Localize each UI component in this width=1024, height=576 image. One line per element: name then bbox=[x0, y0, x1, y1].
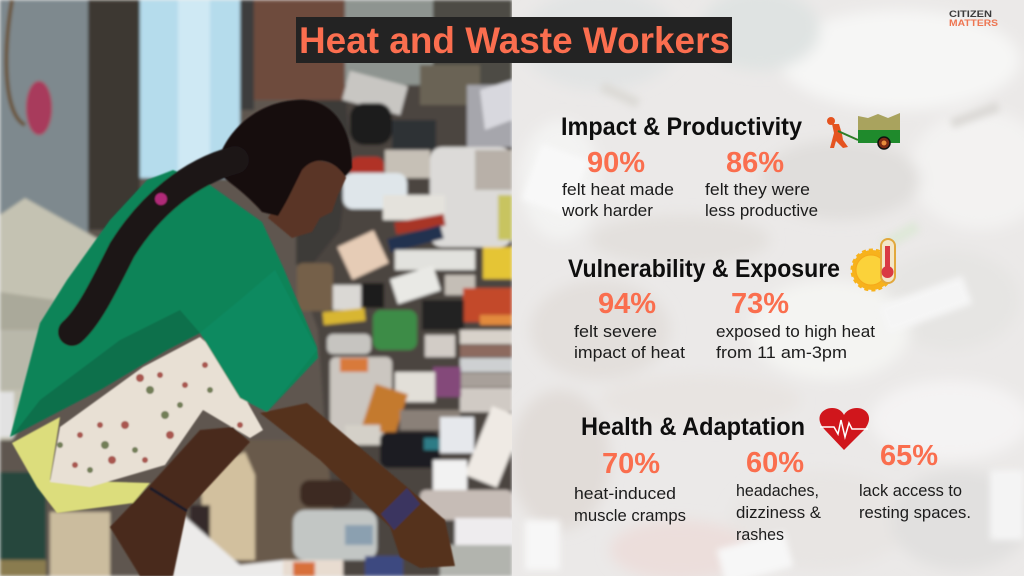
stat: 73%: from 11 am-3pm bbox=[716, 343, 847, 362]
stat: 65%: resting spaces. bbox=[859, 503, 971, 522]
stat: 65% bbox=[859, 440, 971, 522]
stat: 86%: 86% bbox=[726, 147, 784, 179]
stat: 60%: 60% bbox=[746, 447, 804, 479]
white sacks bbox=[0, 198, 100, 576]
stat: 94% bbox=[574, 288, 685, 362]
icon: heart with pulse bbox=[819, 408, 869, 450]
icon: worker pulling a waste cart bbox=[827, 113, 900, 149]
stat: 94%: impact of heat bbox=[574, 343, 685, 362]
arm and hand bbox=[260, 403, 455, 568]
stat: 70%: muscle cramps bbox=[574, 506, 686, 525]
stat: 86% bbox=[705, 147, 818, 220]
stat: 70%: 70% bbox=[602, 448, 660, 480]
section: Health & Adaptation bbox=[574, 408, 971, 544]
stat: 60% bbox=[736, 447, 822, 544]
stat: 86%: less productive bbox=[705, 201, 818, 220]
icon: sun and thermometer bbox=[852, 239, 895, 290]
leg and foot bbox=[110, 427, 250, 576]
stat: 60%: dizziness & bbox=[736, 503, 822, 522]
photo: waste worker sorting rubbish bbox=[0, 0, 525, 576]
stat: 70% bbox=[574, 448, 686, 525]
floor bags bbox=[172, 515, 343, 576]
yellow kurta bbox=[12, 417, 150, 513]
stat: 94%: felt severe bbox=[574, 322, 657, 341]
stool bbox=[50, 452, 255, 576]
stat: 73%: exposed to high heat bbox=[716, 322, 875, 341]
stat: 90% bbox=[561, 147, 674, 220]
stat: 86%: felt they were bbox=[705, 180, 810, 199]
stat: 60%: rashes bbox=[736, 525, 784, 544]
heading: Vulnerability & Exposure: Vulnerability & Exposure bbox=[568, 255, 840, 283]
stat: 94%: 94% bbox=[598, 288, 656, 320]
hair and braid bbox=[72, 100, 352, 332]
heading: Health & Adaptation: Health & Adaptation bbox=[581, 413, 805, 441]
heading: Impact & Productivity: Impact & Productivity bbox=[561, 113, 802, 141]
logo: Citizen Matters bbox=[949, 9, 998, 29]
stat: 90%: 90% bbox=[587, 147, 645, 179]
stat: 90%: felt heat made bbox=[562, 180, 674, 199]
stat: 65%: 65% bbox=[880, 440, 938, 472]
stat: 73%: 73% bbox=[731, 288, 789, 320]
stat: 65%: lack access to bbox=[859, 481, 962, 500]
stat: 60%: headaches, bbox=[736, 481, 819, 500]
stat: 70%: heat-induced bbox=[574, 484, 676, 503]
stat: 73% bbox=[716, 288, 875, 362]
section: Impact & Productivity bbox=[561, 113, 900, 220]
logo: Citizen Matters: MATTERS bbox=[949, 18, 998, 29]
section: Vulnerability & Exposure bbox=[568, 239, 895, 362]
stat: 90%: work harder bbox=[561, 201, 653, 220]
bangles and anklet bbox=[150, 488, 420, 530]
panel: faded waste background bbox=[510, 0, 1024, 576]
wall and room background bbox=[0, 0, 512, 576]
floral trousers bbox=[50, 337, 263, 487]
green shirt bbox=[10, 170, 318, 437]
neck and face bbox=[268, 161, 346, 238]
logo: Citizen Matters: CITIZEN bbox=[949, 9, 992, 20]
title: Heat and Waste Workers bbox=[299, 20, 730, 61]
waste pile bbox=[293, 65, 525, 576]
hanging pink bag and rope bbox=[6, 0, 52, 135]
